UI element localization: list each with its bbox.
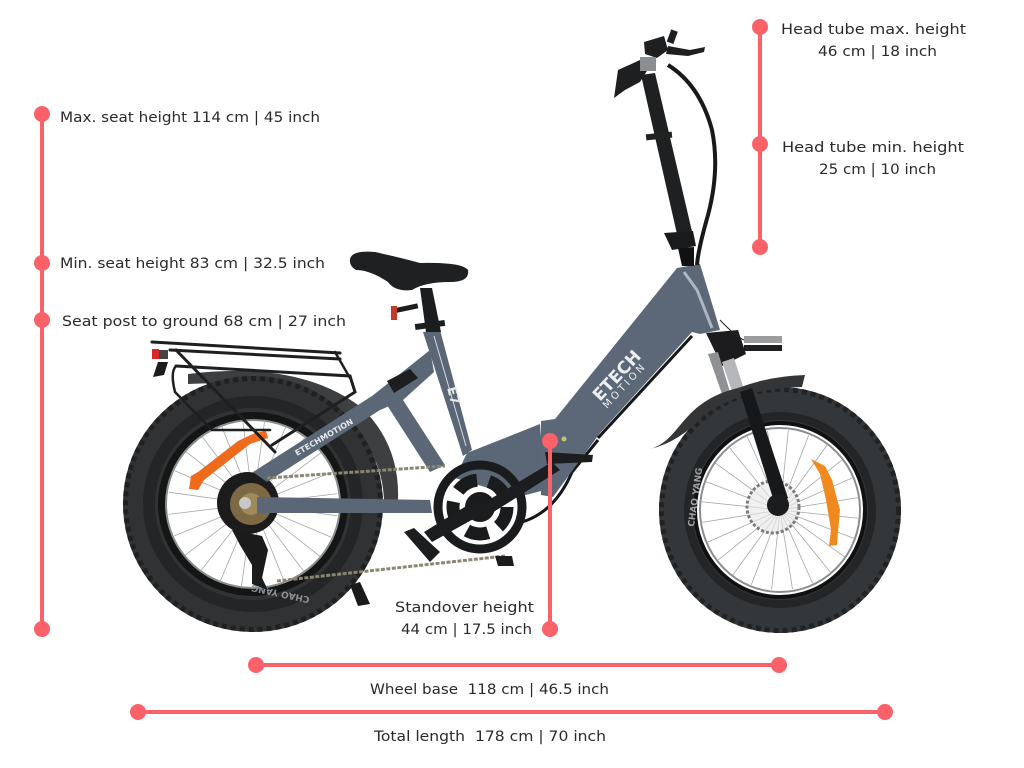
front reflector [811,459,840,546]
rear reflector [189,431,268,490]
seat post and clamp [391,288,445,332]
label: head tube min height [782,140,964,178]
bike illustration [123,29,901,633]
label: head tube max height: 46 cm | 18 inch [818,44,937,60]
label: head tube min height: Head tube min. height [782,140,964,156]
tail light [152,349,168,377]
measure: total length [130,704,893,720]
main frame [541,264,720,497]
cassette and hub [217,472,279,534]
measure: seat heights [34,106,50,637]
brake disc [747,481,799,533]
saddle [350,252,468,290]
rear wheel [123,376,383,632]
label: standover height: Standover height [395,600,534,616]
handlebar [614,29,705,98]
hinge bolt [562,436,566,442]
front headlight [720,320,782,351]
kickstand [350,582,370,606]
label: max seat height: Max. seat height 114 cm | 45 inch [60,110,320,126]
measure: wheel base [248,657,787,673]
label: head tube max height [781,22,966,60]
label: wheel base: Wheel base 118 cm | 46.5 inch [370,682,609,698]
frame lettering: motion: MOTION [601,360,649,411]
label: head tube min height: 25 cm | 10 inch [819,162,936,178]
rear derailleur [232,530,268,590]
lower cable [522,440,598,522]
front fork [706,330,748,406]
stem [641,73,696,266]
label: head tube max height: Head tube max. height [781,22,966,38]
label: min seat height: Min. seat height 83 cm | 32.5 inch [60,256,325,272]
rear rack [152,342,355,452]
label: standover height: 44 cm | 17.5 inch [401,622,532,638]
seat tube highlight [434,336,466,446]
tyre lettering: CHAO YANG [687,467,705,527]
frame lettering: seat tube: E7 [443,385,462,406]
lower fork leg [740,388,788,508]
chain [267,466,505,581]
rear frame [253,330,545,513]
cables [668,65,715,265]
measure: standover height [542,433,558,637]
frame lettering: etech: ETECH [589,347,646,405]
chainring [438,465,522,549]
rear shock [387,369,418,393]
frame lettering: stay: ETECHMOTION [294,417,355,458]
frame underside cable [598,336,692,438]
front wheel [659,387,901,633]
crank arms and pedals [404,452,593,566]
label: seat post to ground: Seat post to ground 68 cm | 27 inch [62,314,346,330]
frame fold highlight [684,272,712,328]
label: total length: Total length 178 cm | 70 inch [373,729,606,745]
front fender [650,375,805,449]
rear fender [188,371,398,500]
rear tyre lettering: CHAO YANG [250,582,311,604]
label: standover height [395,600,534,638]
measure: head tube [752,19,768,255]
